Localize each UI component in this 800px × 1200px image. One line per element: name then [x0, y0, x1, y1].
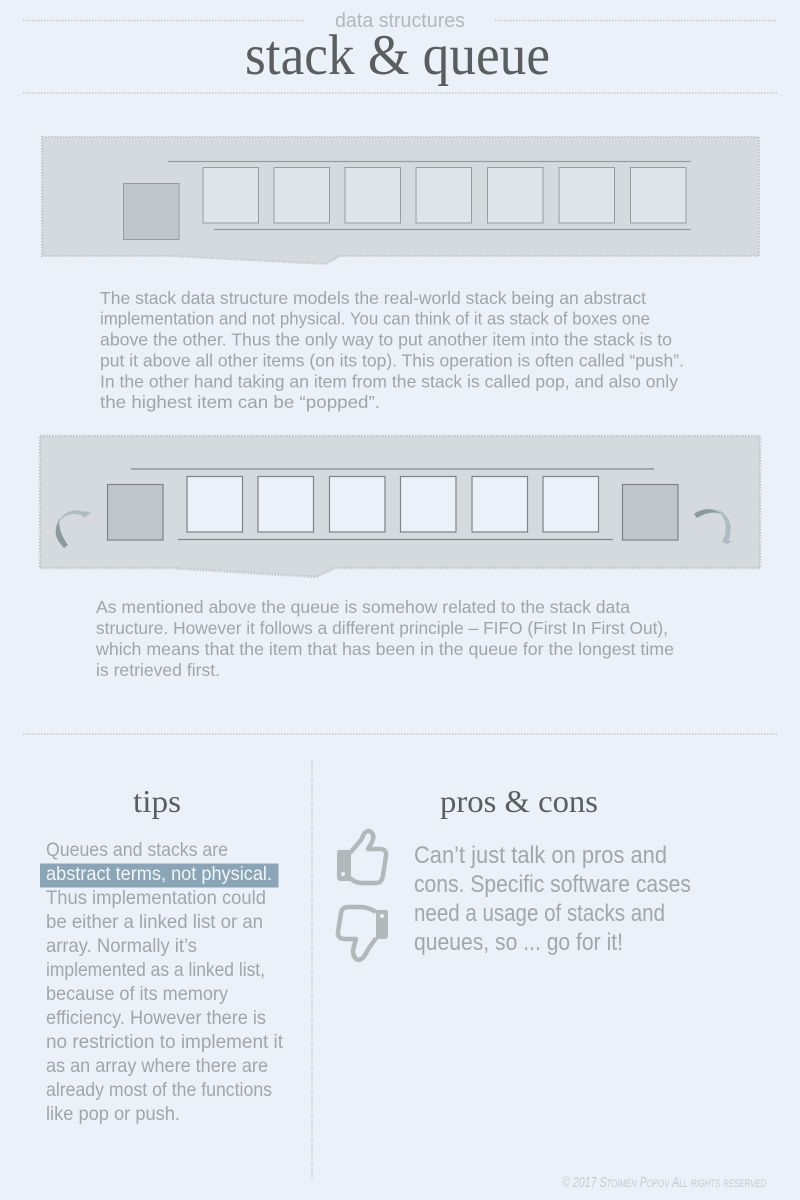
stack description: implementation and not physical. You can think of it as stack of boxes one [100, 308, 650, 328]
pros and cons text: Can’t just talk on pros and [414, 842, 667, 869]
pros and cons text [414, 842, 691, 956]
stack description: above the other. Thus the only way to put another item into the stack is to [100, 330, 672, 350]
pros and cons text: cons. Specific software cases [414, 871, 691, 898]
header: title: stack & queue [245, 24, 550, 87]
tips text [46, 840, 284, 1125]
stack description: The stack data structure models the real-world stack being an abstract [100, 288, 646, 308]
tips text: already most of the functions [46, 1080, 272, 1101]
icon: dequeue arrow [694, 509, 733, 544]
queue description: structure. However it follows a different principle – FIFO (First In First Out), [96, 618, 668, 638]
tips text: abstract terms, not physical. [46, 864, 272, 885]
tips text: implemented as a linked list, [46, 960, 265, 981]
tips text: no restriction to implement it [46, 1032, 284, 1053]
tips text: like pop or push. [46, 1104, 180, 1125]
heading: tips: tips [133, 783, 181, 819]
icon: thumbs down [338, 907, 388, 960]
stack description [100, 288, 684, 412]
queue: entering item [108, 484, 163, 540]
pros and cons text: queues, so ... go for it! [414, 929, 623, 956]
icon: thumbs up [337, 831, 386, 883]
tips text: Thus implementation could [46, 888, 266, 909]
tips text: as an array where there are [46, 1056, 268, 1077]
panel: queue diagram [40, 436, 760, 577]
stack description: the highest item can be “popped”. [100, 392, 380, 412]
queue description [95, 597, 674, 680]
header: subtitle: data structures [335, 10, 465, 32]
queue description: is retrieved first. [96, 660, 220, 680]
highlight bar [40, 864, 278, 888]
pros and cons text: need a usage of stacks and [414, 900, 665, 927]
queue: items [187, 476, 598, 532]
queue description: As mentioned above the queue is somehow related to the stack data [96, 597, 630, 617]
tips text: Queues and stacks are [46, 840, 228, 861]
queue description: which means that the item that has been in the queue for the longest time [95, 639, 674, 659]
stack: items [203, 168, 686, 223]
queue: leaving item [622, 484, 678, 540]
icon: enqueue arrow [56, 510, 91, 548]
tips text: be either a linked list or an [46, 912, 263, 933]
stack description: In the other hand taking an item from the stack is called pop, and also only [100, 372, 678, 392]
heading: pros and cons: pros & cons [440, 783, 598, 819]
stack: item being pushed [124, 184, 179, 240]
tips text: array. Normally it’s [46, 936, 197, 957]
tips text: efficiency. However there is [46, 1008, 266, 1029]
panel: stack diagram [42, 137, 759, 264]
stack description: put it above all other items (on its top). This operation is often called “push”. [100, 350, 684, 370]
tips text: because of its memory [46, 984, 228, 1005]
